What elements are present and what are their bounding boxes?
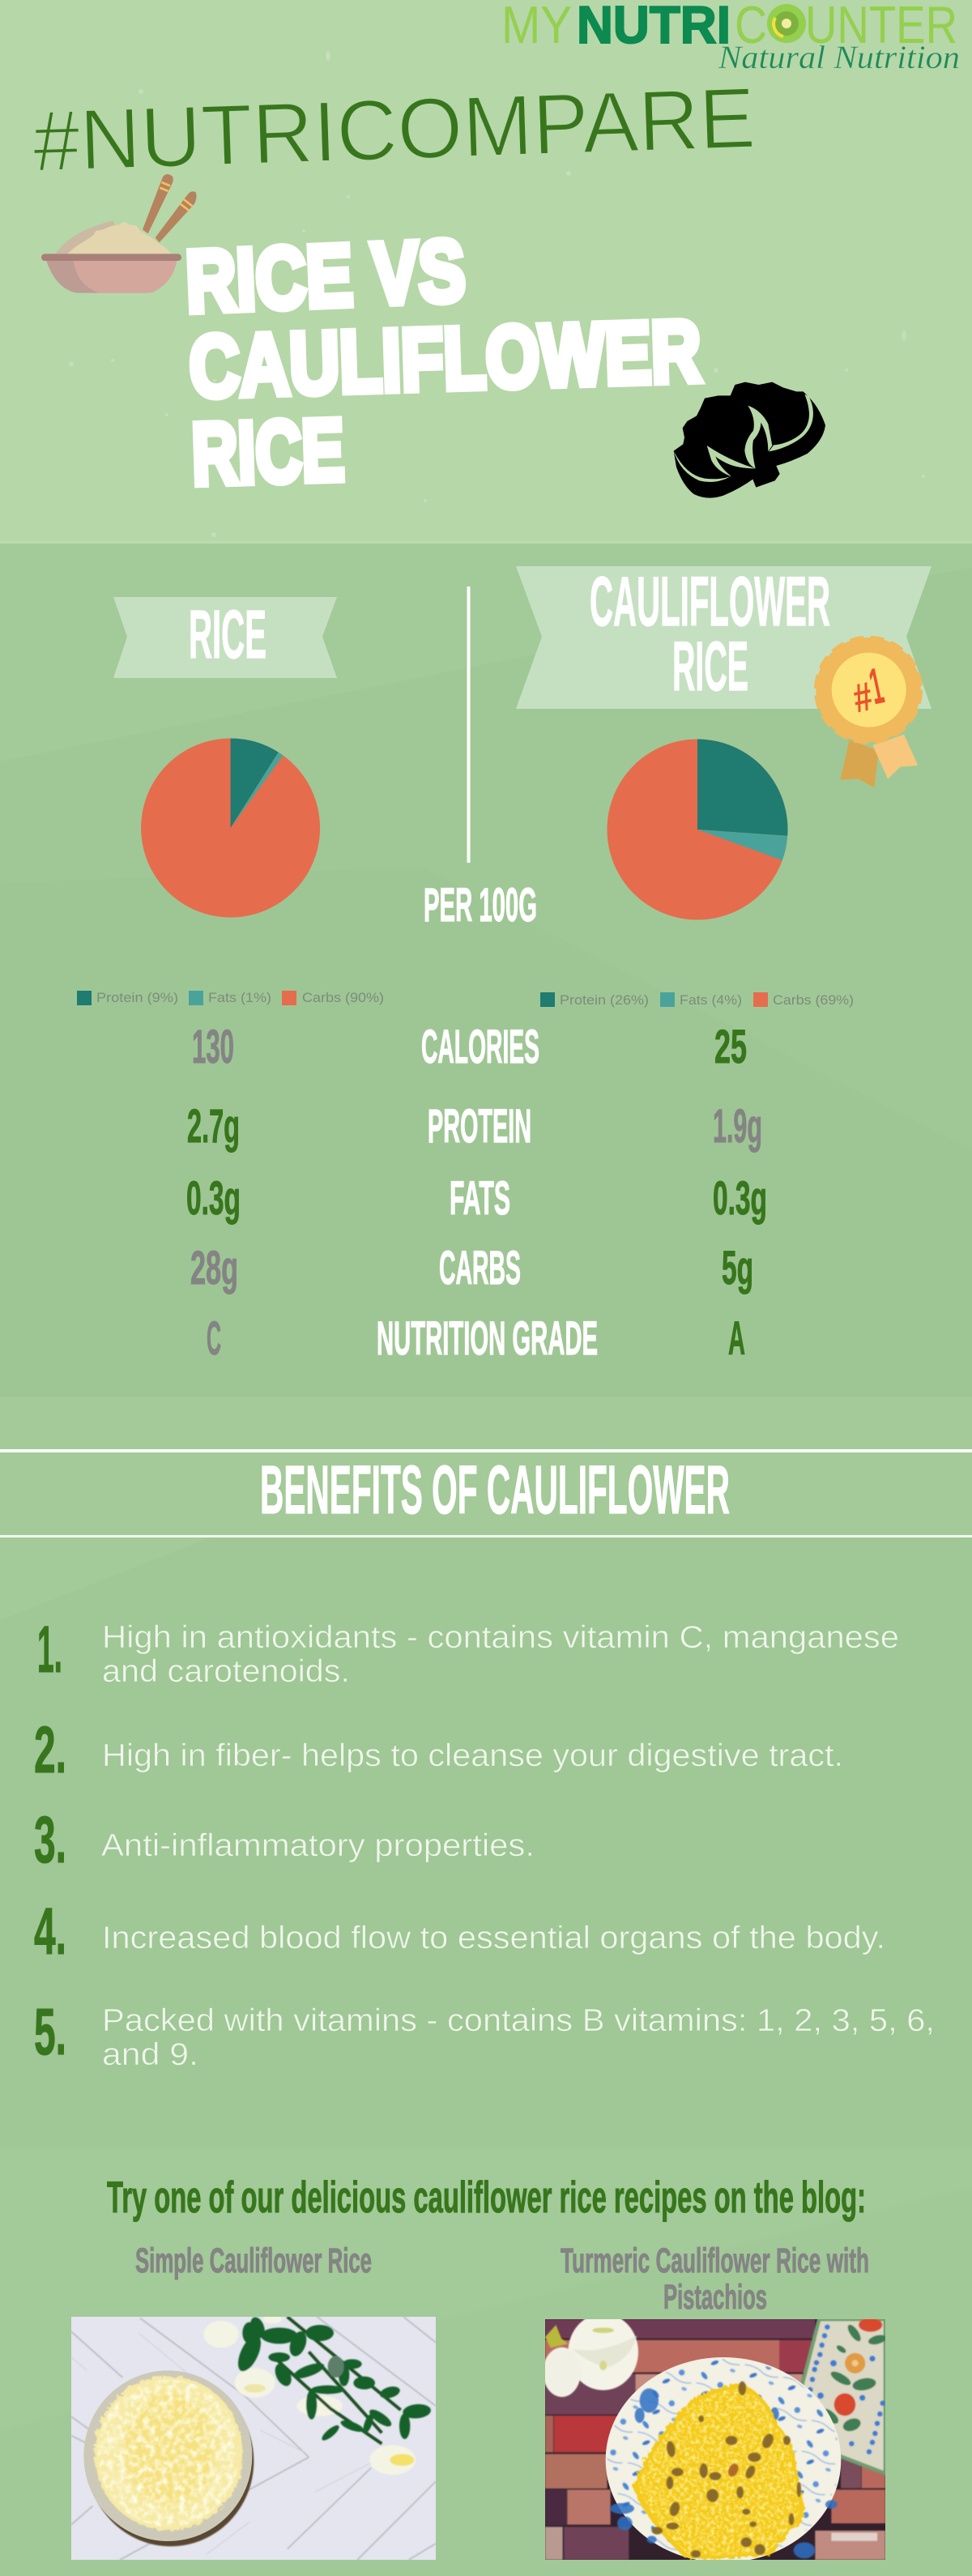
benefit 3: 3. <box>34 1803 66 1877</box>
rice <box>633 2383 804 2559</box>
legend: cauliflower rice: Carbs (69%) <box>773 992 854 1008</box>
plate corner flowers <box>610 2388 838 2558</box>
legend: rice: Carbs (90%) <box>302 990 384 1005</box>
pie chart: cauliflower rice <box>608 739 787 920</box>
row: protein: 2.7g <box>187 1100 240 1153</box>
title: rice vs cauliflower rice <box>184 221 702 503</box>
photo: turmeric cauliflower rice with pistachios <box>543 2314 887 2562</box>
icon: #1 medal: 1 <box>865 658 888 715</box>
benefit 2: 2. <box>34 1713 66 1787</box>
icon: rice bowl <box>41 174 197 293</box>
recipe title: turmeric: Pistachios <box>663 2278 767 2317</box>
benefit 2: High in fiber- helps to cleanse your digestive tract. <box>102 1738 843 1773</box>
benefit 3 <box>34 1803 535 1877</box>
row: fats: FATS <box>450 1172 510 1225</box>
panel: benefits list <box>0 1537 972 2147</box>
row: nutrition grade: C <box>207 1312 221 1365</box>
legend: cauliflower rice: Fats (4%) <box>680 992 742 1008</box>
legend: rice: Fats (1%) <box>208 990 271 1005</box>
divider: vertical <box>467 586 470 863</box>
banner: cauliflower rice <box>516 563 932 709</box>
legend: rice: Protein (9%) <box>96 990 178 1005</box>
legend: cauliflower rice <box>540 992 854 1008</box>
title: rice vs cauliflower rice: RICE <box>190 400 346 503</box>
rice <box>94 2376 243 2530</box>
row: calories: 130 <box>192 1021 234 1073</box>
legend: rice <box>77 990 384 1005</box>
benefit 3: Anti-inflammatory properties. <box>101 1828 535 1863</box>
recipe title: turmeric <box>561 2241 869 2317</box>
white flowers <box>543 2314 638 2397</box>
panel: recipes <box>71 2180 885 2560</box>
panel: benefits header band <box>0 1397 972 1537</box>
shadow <box>94 2420 254 2547</box>
recipe title: simple: Simple Cauliflower Rice <box>135 2241 372 2280</box>
plant <box>203 2315 432 2475</box>
banner: rice <box>113 596 337 678</box>
pie chart: rice <box>141 738 320 917</box>
legend: cauliflower rice: Protein (26%) <box>560 992 649 1008</box>
title: rice vs cauliflower rice: RICE VS <box>184 221 467 331</box>
panel: comparison <box>0 544 972 1397</box>
row: carbs: 28g <box>190 1242 238 1294</box>
row: carbs: CARBS <box>439 1242 521 1294</box>
table: nutrition comparison <box>186 1021 767 1365</box>
benefit 5 <box>34 1995 935 2072</box>
plate <box>606 2357 841 2562</box>
benefit 5: 5. <box>34 1995 66 2069</box>
title: rice vs cauliflower rice: CAULIFLOWER <box>188 301 702 416</box>
icon: kiwi O <box>767 4 806 43</box>
row: carbs <box>190 1242 753 1294</box>
row: nutrition grade: A <box>728 1312 745 1365</box>
benefit 1: and carotenoids. <box>102 1654 350 1689</box>
logo: MyNutriCounter <box>501 0 960 75</box>
icon: cauliflower <box>674 382 825 498</box>
benefit 1 <box>37 1613 899 1689</box>
logo: MyNutriCounter: Natural Nutrition <box>718 39 960 75</box>
napkin <box>802 2318 887 2473</box>
panel: header <box>0 0 972 544</box>
row: nutrition grade <box>207 1312 745 1365</box>
photo: simple cauliflower rice <box>71 2315 436 2560</box>
row: carbs: 5g <box>722 1242 753 1294</box>
row: protein: PROTEIN <box>428 1100 531 1153</box>
row: calories: CALORIES <box>421 1021 539 1073</box>
icon: #1 medal <box>815 637 922 788</box>
row: protein <box>187 1100 762 1153</box>
benefit 5: and 9. <box>102 2037 198 2072</box>
label: per 100g: PER 100G <box>424 879 537 932</box>
benefit 4: Increased blood flow to essential organs of the body. <box>102 1921 885 1955</box>
row: nutrition grade: NUTRITION GRADE <box>377 1312 598 1365</box>
benefit 1: 1. <box>37 1613 62 1687</box>
row: calories: 25 <box>714 1021 747 1073</box>
icon: #1 medal: # <box>849 673 876 722</box>
benefit 4 <box>34 1895 885 1968</box>
benefit 5: Packed with vitamins - contains B vitamins: 1, 2, 3, 5, 6, <box>102 2003 935 2038</box>
banner: cauliflower rice: RICE <box>672 628 748 706</box>
bowl <box>83 2370 252 2541</box>
benefit 2 <box>34 1713 843 1787</box>
banner: rice: RICE <box>189 596 266 672</box>
row: fats <box>186 1172 767 1225</box>
row: fats: 0.3g <box>713 1172 767 1225</box>
benefit 4: 4. <box>34 1895 66 1968</box>
row: fats: 0.3g <box>186 1172 241 1225</box>
pistachios <box>652 2382 801 2557</box>
title: #NUTRICOMPARE: #NUTRICOMPARE <box>32 70 757 190</box>
row: protein: 1.9g <box>713 1100 762 1153</box>
benefit 1: High in antioxidants - contains vitamin C, manganese <box>102 1620 899 1655</box>
row: calories <box>192 1021 747 1073</box>
